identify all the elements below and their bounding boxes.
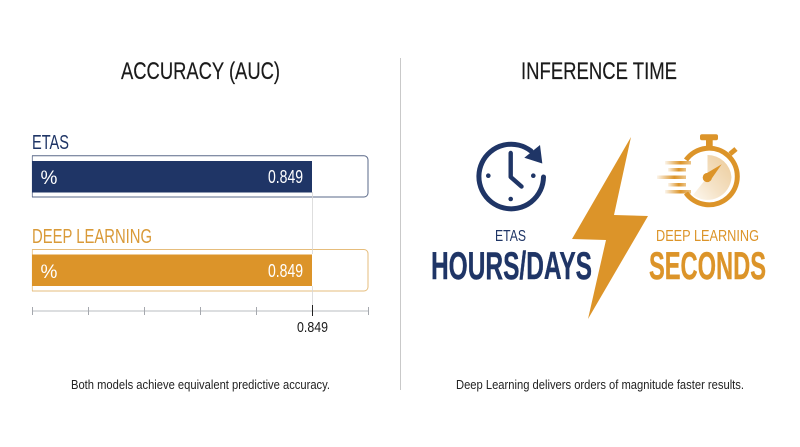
label: ETAS time: HOURS/DAYS [431, 245, 592, 288]
bar: deep learning: % [40, 262, 58, 283]
caption: inference: Deep Learning delivers orders of magnitude faster results. [456, 377, 744, 392]
panel: inference time [431, 58, 766, 392]
label: ETAS time [431, 228, 592, 288]
label: ETAS time: ETAS [495, 228, 526, 245]
bar: deep learning: 0.849 [268, 261, 303, 281]
bar: ETAS: 0.849 [268, 167, 303, 187]
panel: accuracy [32, 58, 368, 392]
icon: clock [479, 144, 544, 209]
heading: inference time: INFERENCE TIME [521, 58, 677, 85]
axis: 0.849 [297, 319, 328, 336]
label: deep learning: DEEP LEARNING [32, 226, 152, 248]
axis [32, 305, 368, 336]
icon: lightning bolt [572, 137, 648, 319]
caption: accuracy: Both models achieve equivalent predictive accuracy. [71, 377, 330, 392]
bar: ETAS: % [40, 168, 58, 189]
heading: accuracy: ACCURACY (AUC) [121, 58, 280, 85]
bar: deep learning [32, 250, 368, 291]
label: ETAS: ETAS [32, 132, 69, 154]
label: deep learning time [649, 228, 766, 288]
icon: stopwatch [657, 134, 737, 205]
label: deep learning time: DEEP LEARNING [656, 228, 759, 245]
bar: ETAS [32, 156, 368, 197]
